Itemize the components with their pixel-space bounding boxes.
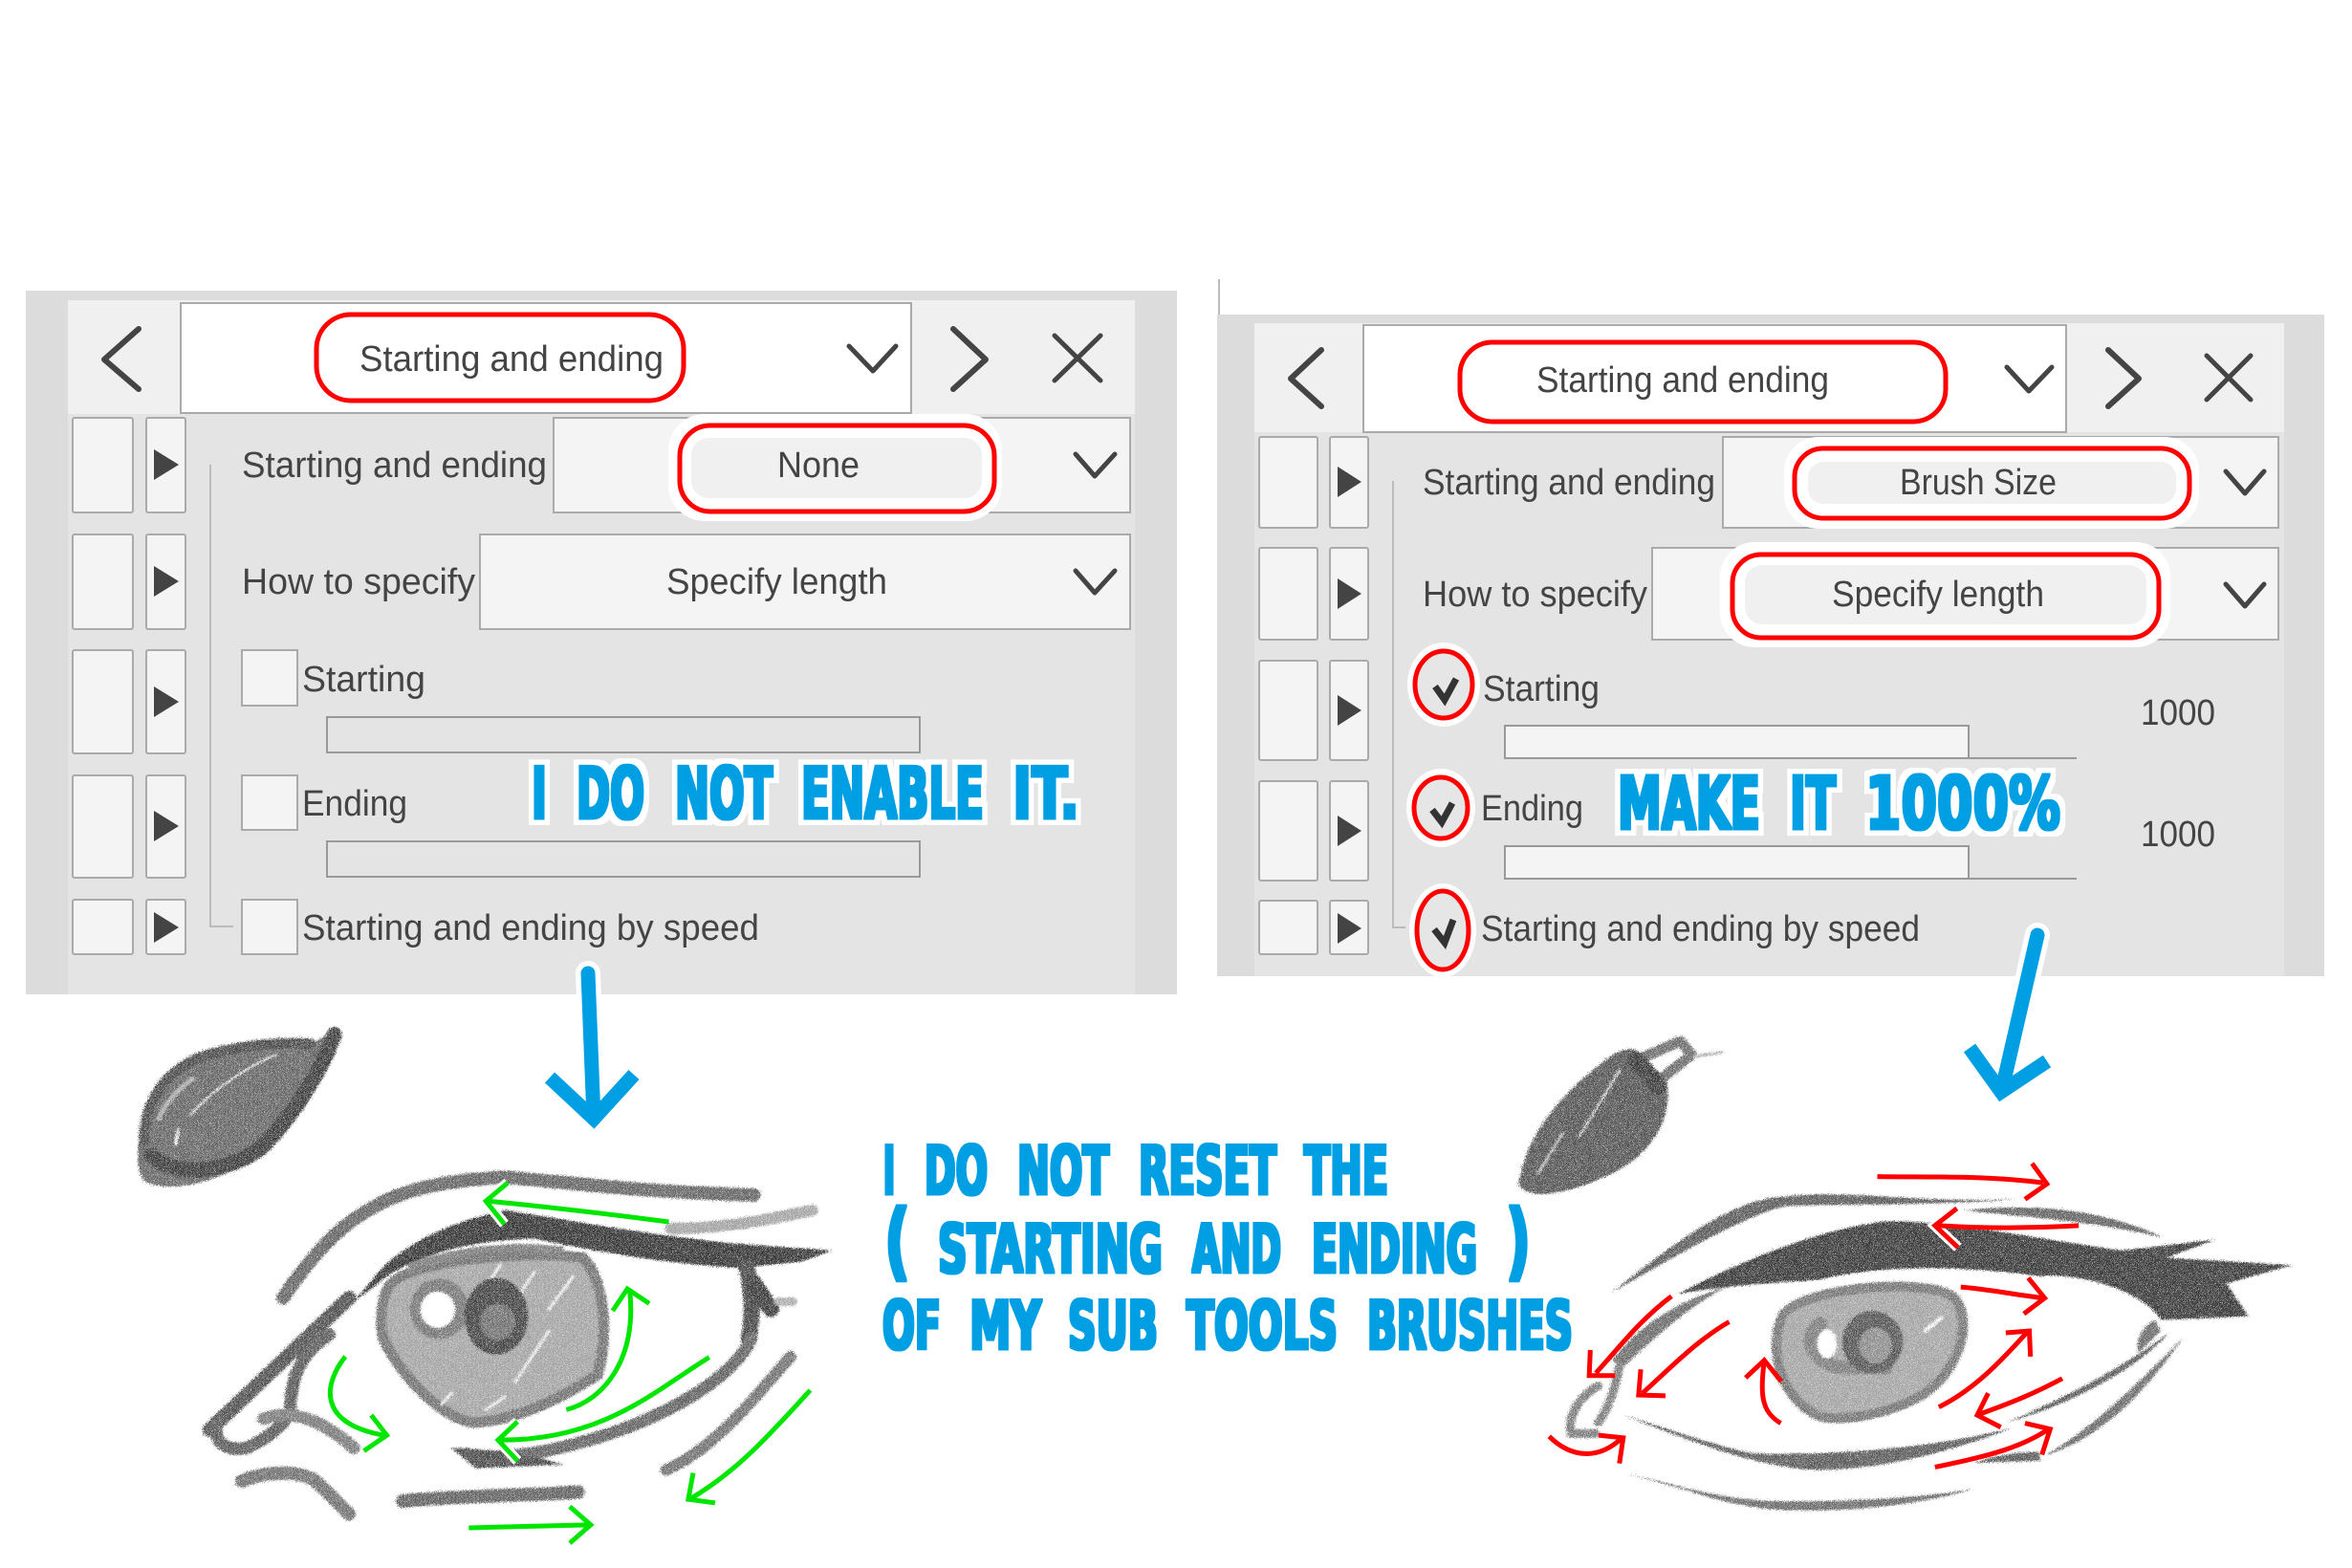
dropdown: none: None [777, 446, 860, 486]
heading: starting and ending selector: Starting and ending [359, 339, 664, 380]
row buttons: right [1259, 437, 1368, 954]
top dropdown: right [1363, 325, 2066, 432]
icon: dropdown chevron [2007, 367, 2052, 391]
text block: centre note: NOT [1017, 1132, 1109, 1210]
row buttons: left [73, 418, 185, 954]
dropdown: specify length: Specify length [666, 562, 887, 602]
text block: centre note: BRUSHES [1367, 1287, 1573, 1365]
label: starting: Starting [302, 660, 425, 700]
text block: centre note: STARTING [938, 1210, 1163, 1289]
label: by speed: Starting and ending by speed [1481, 909, 1920, 949]
icon: back chevron [1291, 350, 1321, 406]
label: starting and ending: Starting and ending [1423, 463, 1715, 503]
arrow: right blue down arrow [1970, 935, 2047, 1092]
illustration: left seed sketch [138, 1028, 339, 1187]
checkbox: ending [242, 775, 297, 830]
top dropdown: left [181, 303, 911, 413]
callout: make it 1000% [1618, 762, 2060, 847]
slider: ending at 1000 [1505, 815, 2215, 879]
callout: make it 1000%: MAKE [1618, 762, 1760, 847]
illustration: left eye sketch [210, 1177, 832, 1514]
text block: centre note: ENDING [1312, 1210, 1477, 1289]
illustration: right seed sketch [1519, 1041, 1722, 1194]
checkbox: starting checked [1407, 642, 1480, 727]
slider: starting [327, 717, 920, 752]
icon: dropdown chevron [849, 346, 896, 371]
text block: centre note: ( [884, 1191, 910, 1290]
text block: centre note: RESET [1139, 1132, 1276, 1210]
text block: centre note: I [883, 1132, 895, 1210]
highlight: top dropdown red outline [316, 315, 684, 401]
dropdown: specify length [480, 534, 1130, 629]
panel: right settings (feature enabled) [1217, 279, 2324, 977]
text block: centre note: SUB [1068, 1287, 1158, 1365]
icon: back chevron [104, 329, 139, 389]
icon: forward chevron [2108, 350, 2139, 406]
checkbox: starting [242, 650, 297, 706]
text block: centre note: AND [1192, 1210, 1281, 1289]
dropdown: brush size [1723, 437, 2278, 529]
callout: I do not enable it: NOT [675, 751, 773, 836]
label: how to specify: How to specify [242, 562, 475, 602]
text block: centre note: TOOLS [1187, 1287, 1338, 1365]
callout: I do not enable it: I [532, 751, 547, 836]
arrow: left blue down arrow [550, 973, 634, 1119]
slider: starting at 1000: 1000 [2141, 693, 2215, 733]
callout: I do not enable it: IT. [1013, 751, 1079, 836]
arrows: red stroke direction [1549, 1164, 2079, 1467]
checkbox: ending checked [1406, 769, 1475, 847]
icon: close [2207, 356, 2251, 400]
label: ending: Ending [1481, 789, 1583, 829]
text block: centre note: ) [1506, 1191, 1531, 1290]
checkbox: by speed checked [1409, 883, 1476, 977]
illustration: right eye sketch [1571, 1194, 2293, 1511]
panel: left settings (feature disabled) [26, 291, 1177, 994]
highlight: top dropdown red outline [1460, 342, 1946, 422]
dropdown: brush size: Brush Size [1900, 463, 2057, 503]
arrows: green stroke direction [330, 1183, 810, 1543]
text block: centre note [882, 1132, 1573, 1365]
text block: centre note: THE [1304, 1132, 1388, 1210]
dropdown: none [554, 414, 1130, 521]
checkbox: by speed [242, 900, 297, 954]
callout: make it 1000%: IT [1790, 762, 1836, 847]
callout: I do not enable it: DO [577, 751, 644, 836]
text block: centre note: DO [925, 1132, 988, 1210]
slider: ending at 1000: 1000 [2141, 815, 2215, 855]
heading: starting and ending selector: Starting and ending [1536, 360, 1829, 401]
label: how to specify: How to specify [1423, 575, 1647, 615]
dropdown: specify length: Specify length [1832, 575, 2044, 615]
slider: starting at 1000 [1505, 693, 2215, 758]
label: starting: Starting [1483, 669, 1600, 709]
icon: forward chevron [953, 329, 986, 389]
label: by speed: Starting and ending by speed [302, 908, 759, 948]
label: ending: Ending [302, 784, 407, 824]
callout: make it 1000%: 1000% [1865, 762, 2060, 847]
dropdown: specify length [1652, 542, 2278, 647]
callout: I do not enable it [532, 751, 1079, 836]
label: starting and ending: Starting and ending [242, 446, 547, 486]
callout: I do not enable it: ENABLE [801, 751, 984, 836]
text block: centre note: MY [969, 1287, 1042, 1365]
icon: close [1055, 336, 1100, 381]
slider: ending [327, 841, 920, 877]
text block: centre note: OF [882, 1287, 941, 1365]
